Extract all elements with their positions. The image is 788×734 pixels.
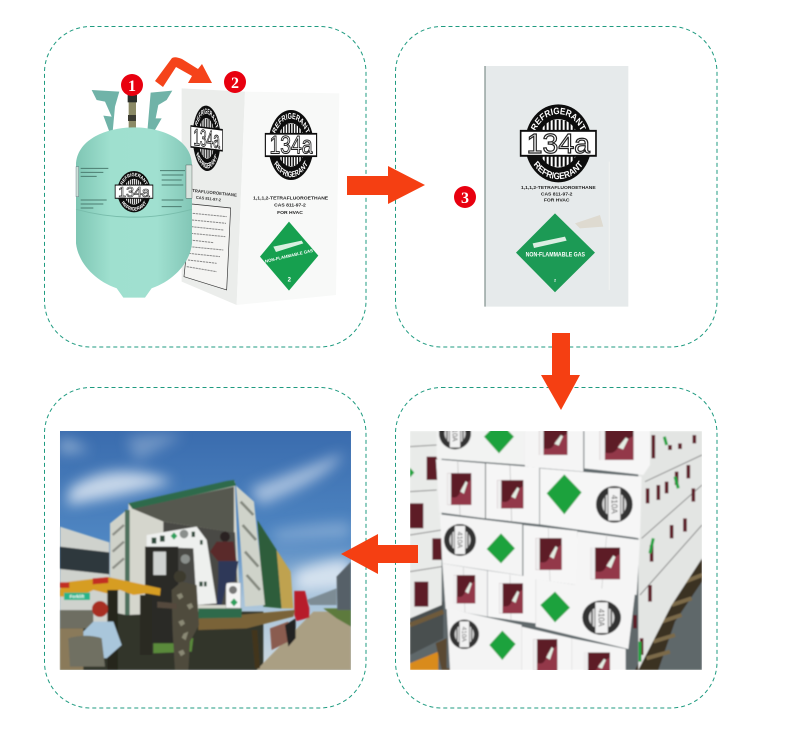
container door frame xyxy=(128,480,236,509)
worker in container xyxy=(210,532,238,605)
worker with camouflage xyxy=(157,571,199,670)
photo: forklift loading truck xyxy=(60,431,351,670)
icon: refrigerant carton: 1,1,1,2-TETRAFLUOROETHANE xyxy=(253,195,329,201)
photo: flat carton xyxy=(485,66,628,307)
building left xyxy=(60,527,109,670)
badge 2: 2 xyxy=(231,75,239,92)
back stack left xyxy=(410,431,442,618)
arrow: panel 2 to panel 4 xyxy=(541,333,580,410)
icon: refrigerant carton xyxy=(182,88,339,305)
photo: refrigerant cylinder and carton xyxy=(76,88,339,305)
container interior xyxy=(128,482,242,618)
forklift xyxy=(60,547,178,670)
open right door xyxy=(236,486,265,607)
photo: flat carton: 1,1,1,2-TETRAFLUOROETHANE xyxy=(521,185,596,191)
red truck far xyxy=(294,591,309,621)
open left door xyxy=(110,510,127,615)
icon: refrigerant carton: NON-FLAMMABLE GAS xyxy=(265,248,314,264)
photo: flat carton: 2 xyxy=(554,279,556,283)
second row cartons xyxy=(436,459,642,538)
panel: palletised cartons xyxy=(396,388,717,708)
fourth row cartons xyxy=(442,563,635,649)
cartons in container xyxy=(147,527,241,608)
badge 2 xyxy=(224,71,246,93)
trailer side green xyxy=(257,520,282,608)
bottom row cartons xyxy=(447,608,626,677)
badge 3 xyxy=(454,186,476,208)
photo: flat carton: NON-FLAMMABLE GAS xyxy=(526,252,585,259)
badge 3: 3 xyxy=(461,190,469,207)
icon: refrigerant cylinder xyxy=(76,90,192,298)
photo: stacked pallet of cartons xyxy=(410,417,702,677)
badge 1: 1 xyxy=(128,78,136,95)
ground xyxy=(60,612,263,670)
arrow: panel 4 to panel 3 xyxy=(341,534,418,574)
forklift: Forklift xyxy=(70,594,85,599)
trailer bed xyxy=(198,610,295,630)
icon: refrigerant carton: TETRAFLUOROETHANE xyxy=(186,187,237,198)
top row cartons xyxy=(436,431,650,476)
icon: refrigerant carton: FOR HVAC xyxy=(277,210,303,216)
panel: cylinder and carton xyxy=(44,26,366,347)
photo: flat carton: FOR HVAC xyxy=(544,197,570,203)
photo: flat carton: CAS 811-97-2 xyxy=(541,191,573,197)
side faces right xyxy=(635,431,702,670)
third row cartons xyxy=(440,514,640,595)
pallet under right side xyxy=(635,558,702,670)
badge 1 xyxy=(121,74,143,96)
icon: refrigerant carton: 2 xyxy=(288,278,292,284)
arrow: curved from cylinder to carton xyxy=(155,57,212,87)
sky xyxy=(60,431,351,670)
icon: refrigerant carton: CAS 811-97-2 xyxy=(196,195,222,202)
icon: refrigerant carton: CAS 811-97-2 xyxy=(274,203,306,209)
panel: loading container xyxy=(44,388,366,708)
arrow: panel 1 to panel 2 xyxy=(347,166,425,204)
panel: sealed carton xyxy=(396,26,717,347)
